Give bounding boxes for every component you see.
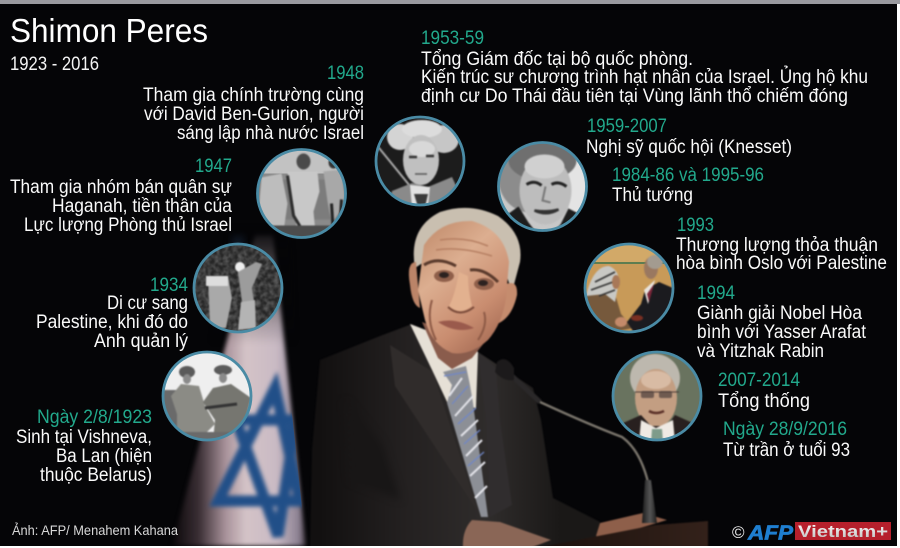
text block: 1923 birth [16, 407, 152, 486]
circle photo: 1993 Oslo handshake [583, 242, 675, 334]
circle photo: 1948 Ben-Gurion [374, 115, 466, 207]
text block: 1948 [143, 63, 364, 144]
face [418, 221, 509, 353]
text block: 1953-59: định cư Do Thái đầu tiên tại Vùng lãnh thổ chiếm đóng [421, 86, 848, 107]
text block: 2016 death [723, 419, 850, 461]
text block: 1934: Anh quản lý [94, 331, 188, 352]
photo credit: Ảnh: AFP/ Menahem Kahana [12, 522, 178, 538]
facial features [424, 239, 498, 340]
text block: 1994: bình với Yasser Arafat [697, 322, 867, 343]
text block: 2007-2014: Tổng thống [718, 391, 810, 412]
logo: AFP Vietnam+: Vietnam+ [798, 522, 888, 541]
circle photo: 1934 Palestine [192, 242, 284, 334]
text block: 1959-2007: Nghị sỹ quốc hội (Knesset) [586, 137, 792, 158]
text block: 1947: Haganah, tiền thân của [52, 196, 232, 217]
logo: AFP Vietnam+ [732, 522, 891, 544]
circle photo: 1923 soldiers [161, 350, 253, 442]
circle photo: Peres, Knesset member [496, 140, 588, 232]
text block: 1948: 1948 [327, 63, 364, 84]
text block: 1953-59: Tổng Giám đốc tại bộ quốc phòng. [421, 49, 693, 70]
text block: 1923 birth: Ba Lan (hiện [56, 446, 152, 467]
microphone [495, 359, 657, 523]
hair [414, 208, 521, 292]
tie [443, 366, 488, 517]
text block: 1993: Thương lượng thỏa thuận [676, 235, 878, 256]
title: Shimon Peres [10, 12, 208, 49]
shirt [410, 324, 478, 408]
circle photo: 2007 President [611, 350, 703, 442]
text block: 1994 [697, 283, 867, 362]
text block: prime minister [612, 165, 764, 206]
text block: 1948: sáng lập nhà nước Israel [177, 123, 364, 144]
logo: AFP Vietnam+: © [732, 523, 745, 542]
right hand [596, 513, 667, 538]
text block: prime minister: Thủ tướng [612, 185, 693, 206]
text block: 1947: 1947 [195, 156, 232, 177]
text block: 1934 [36, 275, 188, 352]
text block: 1923 birth: thuộc Belarus) [40, 465, 152, 486]
text block: 1959-2007 [586, 116, 792, 158]
lapels [390, 346, 434, 442]
top grey band [0, 0, 900, 4]
text block: 1994: và Yitzhak Rabin [697, 341, 824, 362]
text block: 1947: Lực lượng Phòng thủ Israel [24, 215, 232, 236]
text block: 1934: Palestine, khi đó do [36, 312, 188, 333]
photo: Israeli flag [172, 228, 306, 546]
text block: 1934: 1934 [150, 275, 188, 296]
text block: 2016 death: Ngày 28/9/2016 [723, 419, 847, 440]
text block: 1959-2007: 1959-2007 [587, 116, 667, 137]
text block: 1993: 1993 [677, 215, 714, 236]
text block: 1953-59: Kiến trúc sư chương trình hạt nhân của Israel. Ủng hộ khu [421, 66, 868, 88]
ears [409, 262, 420, 308]
lectern [550, 520, 708, 546]
photo: Shimon Peres at lectern [310, 208, 708, 548]
circle photo: 1947 Haganah group [256, 148, 348, 240]
text block: 1993 [676, 215, 887, 274]
text block: 1934: Di cư sang [107, 293, 188, 314]
neck [422, 322, 488, 369]
text block: 1948: Tham gia chính trường cùng [143, 85, 364, 106]
text block: 1953-59: 1953-59 [421, 28, 484, 49]
left hand [463, 520, 551, 548]
text block: 1994: Giành giải Nobel Hòa [697, 303, 862, 324]
text block: 1923 birth: Sinh tại Vishneva, [16, 427, 152, 448]
text block: 2007-2014: 2007-2014 [718, 370, 800, 391]
text block: 2007-2014 [718, 370, 810, 412]
lifespan: 1923 - 2016 [10, 54, 99, 75]
suit jacket [310, 324, 600, 548]
text block: 1947 [10, 156, 232, 236]
text block: 2016 death: Từ trần ở tuổi 93 [723, 440, 850, 461]
text block: 1947: Tham gia nhóm bán quân sự [10, 177, 232, 198]
text block: 1923 birth: Ngày 2/8/1923 [37, 407, 152, 428]
text block: 1994: 1994 [697, 283, 735, 304]
logo: AFP Vietnam+: AFP [747, 522, 794, 544]
text block: 1948: với David Ben-Gurion, người [144, 104, 364, 125]
text block: prime minister: 1984-86 và 1995-96 [612, 165, 764, 186]
text block: 1953-59 [421, 28, 868, 107]
